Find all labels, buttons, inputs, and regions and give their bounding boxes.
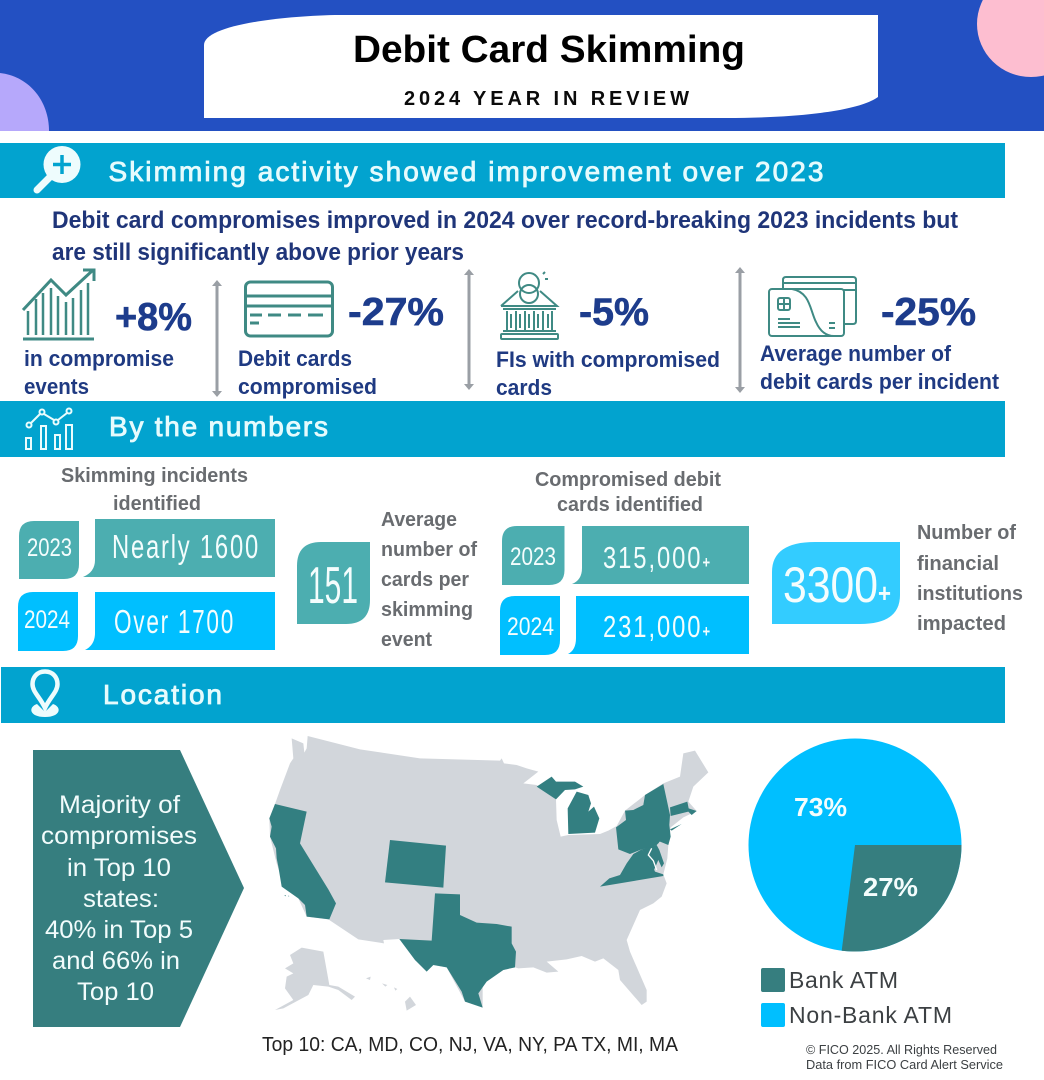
panel: skimming incidents	[18, 465, 275, 651]
year tag 2023	[502, 526, 564, 585]
highlighted states	[269, 777, 697, 1008]
arrow	[464, 269, 474, 390]
year tag 2023: 2023	[27, 534, 72, 562]
section banner: by the numbers	[0, 401, 1005, 457]
section banner: skimming activity	[0, 143, 1005, 198]
subtitle: 2024 YEAR IN REVIEW	[404, 88, 689, 110]
stat label	[381, 509, 477, 651]
panel heading	[61, 465, 248, 515]
icon: chart with line	[26, 408, 72, 449]
stat: debit cards compromised	[238, 282, 444, 399]
icon: two credit cards	[769, 277, 856, 336]
callout: top 10 states	[33, 750, 244, 1027]
intro text: are still significantly above prior years	[52, 239, 464, 266]
stat label: compromised	[238, 374, 377, 399]
stat label: cards per	[381, 569, 469, 591]
callout: top 10 states: compromises	[41, 822, 197, 850]
stat: cards per incident	[760, 277, 1000, 394]
stat label: FIs with compromised	[496, 347, 720, 372]
legend: Bank ATM	[789, 967, 898, 993]
panel heading: Compromised debit	[535, 469, 721, 491]
stat label: Average	[381, 509, 457, 531]
map caption: Top 10: CA, MD, CO, NJ, VA, NY, PA TX, MI, MA	[262, 1034, 679, 1056]
stat label: in compromise	[24, 346, 174, 371]
stat label	[238, 346, 377, 399]
panel: compromised debit cards	[500, 469, 749, 655]
stat value: -5%	[579, 291, 649, 334]
copyright note	[806, 1042, 1003, 1072]
year tag 2023: 2023	[510, 543, 556, 571]
stat label	[496, 347, 720, 400]
value box	[772, 542, 900, 624]
stat value: -25%	[881, 291, 976, 334]
callout: top 10 states: states:	[83, 885, 159, 913]
stat label	[917, 522, 1023, 635]
legend: Non-Bank ATM	[789, 1002, 952, 1028]
year tag 2023	[19, 521, 79, 579]
stat label: institutions	[917, 583, 1023, 605]
stat label: Number of	[917, 522, 1016, 544]
value nearly 1600: Nearly 1600	[112, 528, 260, 565]
callout: top 10 states: and 66% in	[52, 947, 180, 975]
stat label: financial	[917, 553, 999, 575]
stat value: -27%	[348, 291, 444, 334]
value 315,000+: 315,000+	[603, 540, 712, 575]
value over 1700: Over 1700	[114, 603, 235, 640]
value 231,000+	[568, 596, 749, 654]
callout: top 10 states: in Top 10	[67, 854, 171, 882]
value box: 3300+	[783, 557, 891, 613]
stat: 151 average cards	[297, 509, 477, 651]
pie chart	[748, 738, 962, 952]
icon: debit card	[245, 282, 332, 336]
stat: FIs with compromised cards	[496, 272, 720, 400]
stat label: event	[381, 629, 432, 651]
value over 1700	[85, 592, 275, 650]
year tag 2024	[500, 596, 560, 655]
copyright note: © FICO 2025. All Rights Reserved	[806, 1042, 997, 1057]
arrow	[212, 280, 222, 397]
header band	[0, 0, 1044, 131]
pie chart: 73%	[794, 792, 847, 822]
stat: 3300+ institutions	[772, 522, 1023, 635]
stat label: Average number of	[760, 341, 952, 366]
panel heading: cards identified	[557, 494, 703, 516]
icon: bank with coins	[501, 272, 558, 339]
icon: location pin	[31, 672, 59, 717]
stat value: +8%	[115, 296, 192, 339]
intro text	[52, 207, 958, 266]
section heading: Skimming activity showed improvement over 2023	[108, 156, 824, 187]
chesapeake bay and delmarva	[648, 842, 667, 870]
arrow	[735, 267, 745, 393]
value nearly 1600	[83, 519, 275, 577]
callout: top 10 states: Top 10	[77, 978, 154, 1006]
map: US states	[269, 736, 708, 1011]
stat label: impacted	[917, 613, 1006, 635]
section heading: By the numbers	[109, 411, 328, 442]
stat label	[760, 341, 1000, 394]
section banner: location	[1, 667, 1005, 723]
year tag 2024: 2024	[24, 606, 70, 634]
stat label: cards	[496, 375, 552, 400]
panel heading	[535, 469, 721, 516]
map base	[269, 736, 708, 1011]
stat label: events	[24, 374, 89, 399]
stat label	[24, 346, 174, 399]
pie chart: 27%	[863, 872, 918, 902]
callout: top 10 states: 40% in Top 5	[45, 916, 193, 944]
panel heading: identified	[113, 493, 201, 515]
stat label: debit cards per incident	[760, 369, 1000, 394]
title: Debit Card Skimming	[353, 29, 745, 71]
panel heading: Skimming incidents	[61, 465, 248, 487]
year tag 2024: 2024	[507, 613, 554, 641]
value box	[297, 542, 370, 624]
stat label: skimming	[381, 599, 473, 621]
value 231,000+: 231,000+	[603, 609, 712, 644]
stat label: number of	[381, 539, 477, 561]
year tag 2024	[18, 592, 78, 651]
intro text: Debit card compromises improved in 2024 over record-breaking 2023 incidents but	[52, 207, 958, 234]
value 315,000+	[572, 526, 749, 584]
stat label: Debit cards	[238, 346, 352, 371]
legend	[761, 967, 952, 1028]
icon: rising bar chart	[23, 270, 94, 339]
section heading: Location	[103, 679, 222, 710]
icon: magnifier plus	[37, 146, 80, 190]
value box: 151	[308, 557, 358, 615]
stat: compromise events	[23, 270, 192, 399]
callout: top 10 states: Majority of	[59, 791, 180, 819]
copyright note: Data from FICO Card Alert Service	[806, 1057, 1003, 1072]
